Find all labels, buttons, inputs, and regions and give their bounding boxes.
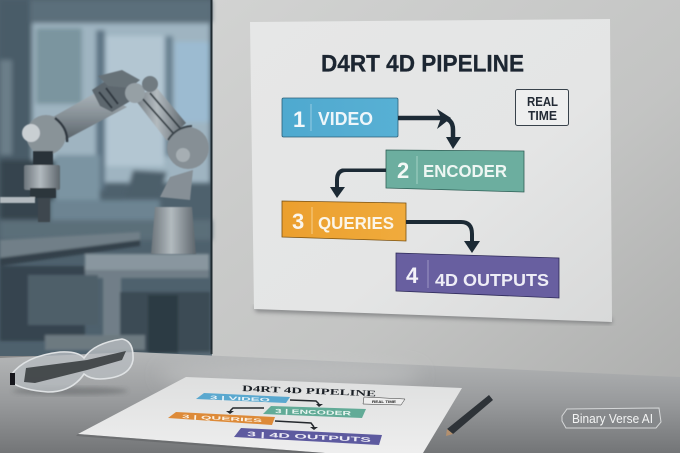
step 3: queries: 3 xyxy=(292,209,304,234)
title: D4RT 4D PIPELINE xyxy=(321,50,524,78)
desk badge: REAL TIME xyxy=(372,399,396,404)
desk step 4: 3 | 4D OUTPUTS xyxy=(247,431,373,444)
step 3: queries: QUERIES xyxy=(318,213,394,233)
work tables xyxy=(0,232,210,353)
step 2: encoder xyxy=(386,150,524,192)
badge: real time: REAL xyxy=(527,95,558,109)
desk step 2: 3 | ENCODER xyxy=(275,409,352,417)
desk step 1 xyxy=(196,393,290,404)
desk step 3 xyxy=(168,412,275,425)
icon: robot arm xyxy=(0,70,209,254)
step 1: video: VIDEO xyxy=(318,108,373,129)
desk arrows xyxy=(226,400,323,430)
step 4: 4D outputs xyxy=(396,253,559,298)
icon: pencil xyxy=(446,395,493,436)
step 4: 4D outputs: 4 xyxy=(406,263,419,288)
icon: safety glasses xyxy=(10,339,133,395)
table xyxy=(0,352,680,453)
desk badge xyxy=(363,397,405,405)
desk step 3: 3 | QUERIES xyxy=(182,414,264,424)
glass tint xyxy=(0,0,212,356)
arrow: encoder to queries xyxy=(330,170,386,198)
workshop behind glass xyxy=(0,0,212,356)
arrow: queries to outputs xyxy=(406,222,480,253)
step 1: video xyxy=(282,98,398,137)
desk title: D4RT 4D PIPELINE xyxy=(242,383,377,398)
wall xyxy=(205,0,680,385)
watermark: Binary Verse AI: Binary Verse AI xyxy=(572,411,653,426)
desk step 1: 3 | VIDEO xyxy=(210,395,270,404)
badge: real time: TIME xyxy=(528,109,557,123)
poster shadow xyxy=(254,306,612,324)
step 4: 4D outputs: 4D OUTPUTS xyxy=(435,270,549,290)
desk printout of pipeline xyxy=(76,377,462,453)
step 2: encoder: 2 xyxy=(397,158,409,183)
watermark: Binary Verse AI xyxy=(562,408,661,428)
step 3: queries xyxy=(282,201,406,241)
badge: real time xyxy=(516,90,568,126)
arrow: video to encoder xyxy=(398,109,461,149)
desk step 2 xyxy=(263,406,366,418)
step 2: encoder: ENCODER xyxy=(423,161,507,181)
step 1: video: 1 xyxy=(293,107,305,132)
poster: D4RT 4D pipeline xyxy=(250,19,612,322)
glass partition frame xyxy=(210,0,212,354)
desk step 4 xyxy=(234,428,382,445)
